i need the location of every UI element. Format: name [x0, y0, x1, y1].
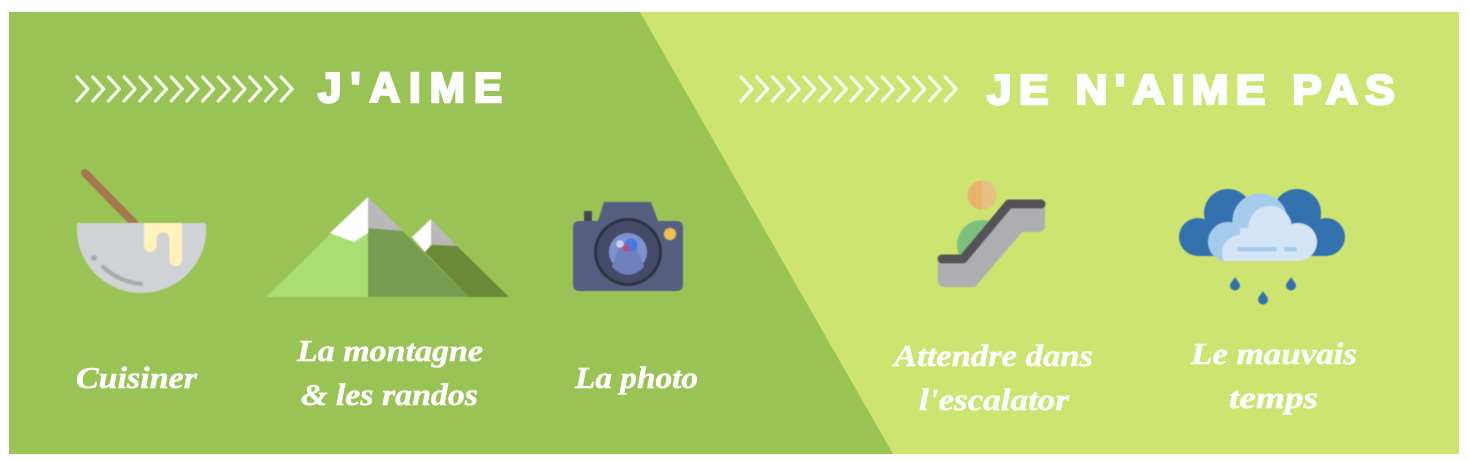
item: bad weather	[1179, 189, 1357, 415]
caption: le mauvais temps: Le mauvais	[1190, 336, 1357, 371]
chevron row right	[741, 77, 956, 101]
caption: la montagne & les randos	[296, 333, 483, 412]
icon: mountains	[266, 197, 509, 297]
icon: escalator	[938, 180, 1045, 287]
item: la photo	[573, 202, 698, 395]
icon: camera	[573, 202, 683, 291]
caption: la montagne & les randos: & les randos	[301, 377, 478, 412]
heading row: je n'aime pas	[741, 66, 1402, 113]
caption: le mauvais temps: temps	[1229, 380, 1318, 415]
caption: attendre dans l'escalator	[892, 338, 1093, 417]
heading: j'aime: J'AIME	[318, 64, 511, 111]
icon: rain cloud	[1179, 189, 1345, 304]
caption: attendre dans l'escalator: Attendre dans	[892, 338, 1093, 373]
icon: mixing bowl	[77, 173, 206, 293]
caption: cuisiner: Cuisiner	[76, 360, 198, 395]
caption: la montagne & les randos: La montagne	[296, 333, 483, 368]
caption: attendre dans l'escalator: l'escalator	[919, 382, 1070, 417]
panel: je n'aime pas	[640, 12, 1459, 454]
item: escalator	[892, 180, 1093, 417]
panel background: dark green	[9, 12, 893, 454]
item: cuisiner	[76, 173, 206, 395]
heading row: j'aime	[77, 64, 511, 111]
caption: le mauvais temps	[1190, 336, 1357, 415]
panel: j'aime	[9, 12, 893, 454]
item: la montagne	[266, 197, 509, 412]
heading: je n'aime pas: JE N'AIME PAS	[987, 66, 1402, 113]
caption: la photo: La photo	[574, 360, 698, 395]
chevron row left	[77, 77, 292, 101]
